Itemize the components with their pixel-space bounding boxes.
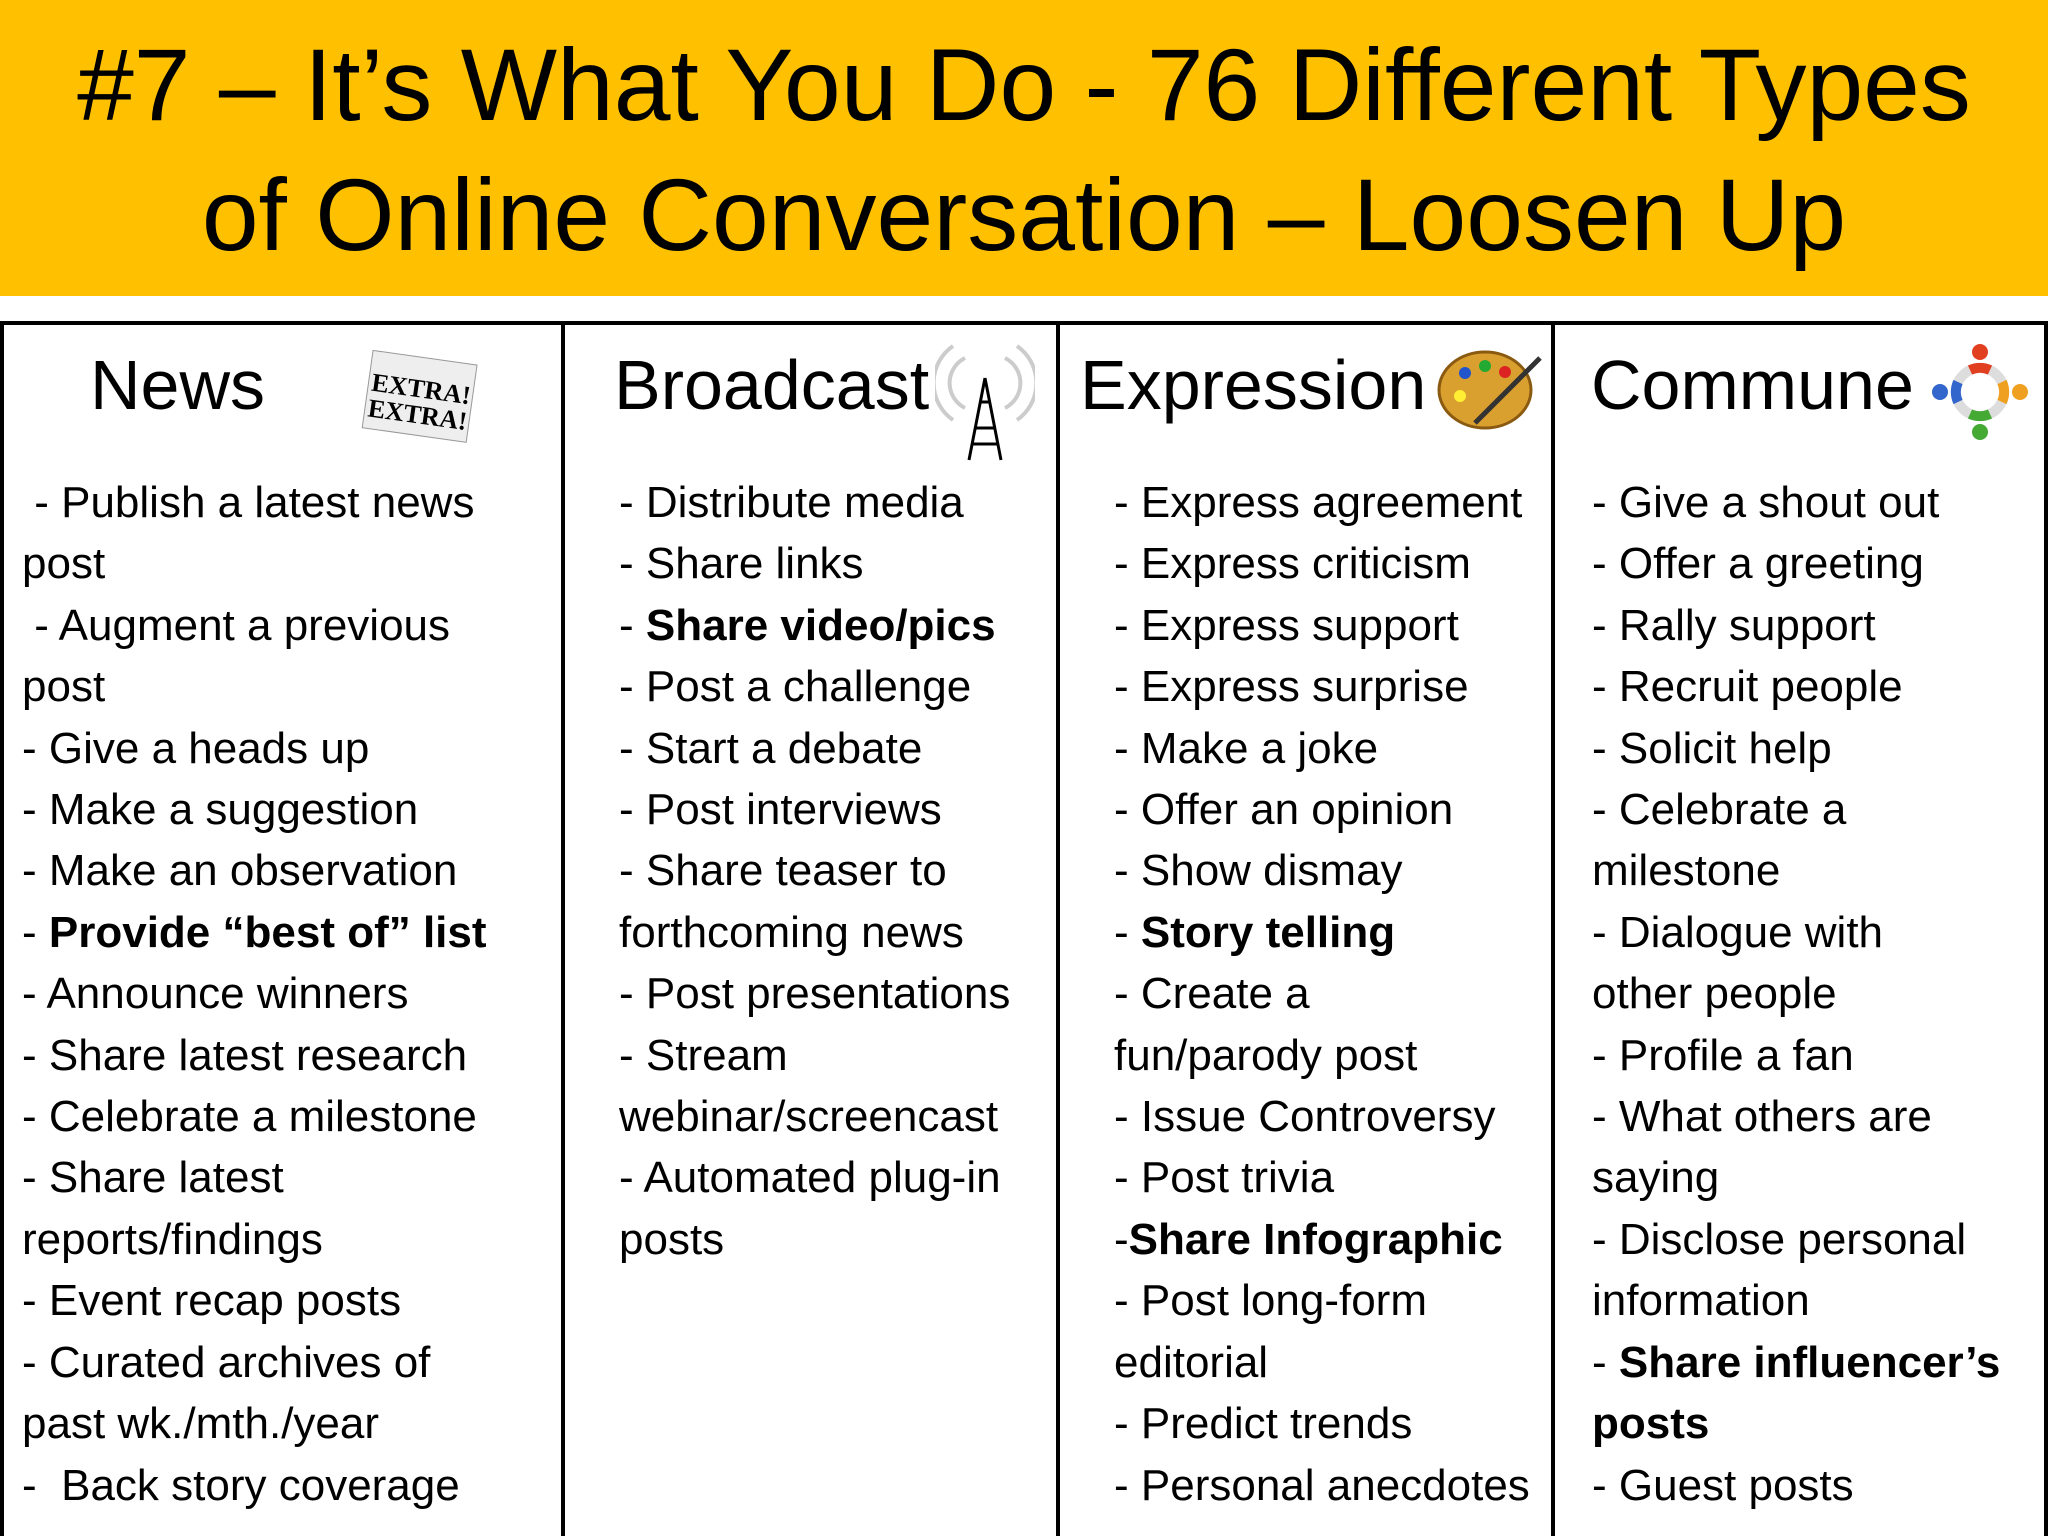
heading: Expression: Expression bbox=[1080, 346, 1426, 424]
list: News: - Make an observation bbox=[22, 846, 457, 895]
list: Expression: - Story telling bbox=[1114, 908, 1395, 957]
title bbox=[0, 0, 2048, 296]
list: News: - Share latest research bbox=[22, 1031, 467, 1080]
list: Broadcast: - Automated plug-in bbox=[619, 1153, 1001, 1202]
list: News: - Celebrate a milestone bbox=[22, 1092, 477, 1141]
list: Commune: - Celebrate a bbox=[1592, 785, 1846, 834]
list: Broadcast: - Stream bbox=[619, 1031, 788, 1080]
list: News: - Provide “best of” list bbox=[22, 908, 487, 957]
list: Expression: - Express agreement bbox=[1114, 478, 1522, 527]
list: Commune bbox=[1592, 478, 2000, 1510]
list: Broadcast: - Share links bbox=[619, 539, 864, 588]
list: Commune: - Recruit people bbox=[1592, 662, 1903, 711]
list: Broadcast: - Post a challenge bbox=[619, 662, 971, 711]
list: Expression: - Express criticism bbox=[1114, 539, 1471, 588]
icon: newspaper: EXTRA! bbox=[370, 368, 473, 410]
list: News: - Curated archives of bbox=[22, 1338, 430, 1387]
icon: newspaper bbox=[362, 350, 478, 443]
list: Commune: - Disclose personal bbox=[1592, 1215, 1966, 1264]
list: Commune: - Share influencer’s bbox=[1592, 1338, 2000, 1387]
list: News: - Make a suggestion bbox=[22, 785, 418, 834]
list: Expression: - Create a bbox=[1114, 969, 1310, 1018]
list: Expression: - Make a joke bbox=[1114, 724, 1378, 773]
list: Expression: -Share Infographic bbox=[1114, 1215, 1503, 1264]
list: Broadcast: - Post presentations bbox=[619, 969, 1010, 1018]
list: News: - Share latest bbox=[22, 1153, 284, 1202]
list: Broadcast: - Share video/pics bbox=[619, 601, 996, 650]
list: Broadcast: - Start a debate bbox=[619, 724, 922, 773]
list: News: - Augment a previous bbox=[34, 601, 450, 650]
list: Expression: - Express surprise bbox=[1114, 662, 1469, 711]
list: Broadcast: webinar/screencast bbox=[619, 1092, 998, 1141]
list: Expression: - Offer an opinion bbox=[1114, 785, 1453, 834]
list: Commune: - Profile a fan bbox=[1592, 1031, 1854, 1080]
list: Broadcast bbox=[619, 478, 1010, 1264]
title: of Online Conversation – Loosen Up bbox=[202, 158, 1846, 272]
list: Commune: - Dialogue with bbox=[1592, 908, 1883, 957]
list: News: post bbox=[22, 662, 105, 711]
list: Commune: - Give a shout out bbox=[1592, 478, 1939, 527]
list: Broadcast: - Post interviews bbox=[619, 785, 942, 834]
list: News: - Back story coverage bbox=[22, 1460, 460, 1510]
list: Commune: - Solicit help bbox=[1592, 724, 1832, 773]
list: Broadcast: forthcoming news bbox=[619, 908, 964, 957]
list: Commune: - What others are bbox=[1592, 1092, 1932, 1141]
heading: Commune: Commune bbox=[1591, 346, 1914, 424]
list: Broadcast: - Share teaser to bbox=[619, 846, 947, 895]
list: Commune: saying bbox=[1592, 1153, 1719, 1202]
list: News: - Give a heads up bbox=[22, 724, 369, 773]
list: Commune: milestone bbox=[1592, 846, 1780, 895]
list: Expression: - Issue Controversy bbox=[1114, 1092, 1495, 1141]
list: Commune: - Rally support bbox=[1592, 601, 1876, 650]
icon: newspaper: EXTRA! bbox=[366, 393, 469, 436]
list: Broadcast: posts bbox=[619, 1215, 724, 1264]
list: Expression: - Personal anecdotes bbox=[1114, 1460, 1530, 1510]
icon: antenna tower bbox=[935, 344, 1035, 460]
list: Broadcast: - Distribute media bbox=[619, 478, 964, 527]
title: #7 – It’s What You Do - 76 Different Types bbox=[77, 28, 1971, 142]
list: News: post bbox=[22, 539, 105, 588]
icon: community people ring bbox=[1932, 344, 2028, 440]
list: Expression: - Express support bbox=[1114, 601, 1459, 650]
list: Expression: - Show dismay bbox=[1114, 846, 1403, 895]
list: Expression: editorial bbox=[1114, 1338, 1268, 1387]
list: Commune: - Offer a greeting bbox=[1592, 539, 1924, 588]
list: Expression: - Post trivia bbox=[1114, 1153, 1334, 1202]
list: Commune: - Guest posts bbox=[1592, 1460, 1854, 1510]
list: Commune: information bbox=[1592, 1276, 1810, 1325]
list: Expression: - Predict trends bbox=[1114, 1399, 1412, 1448]
list: Commune: posts bbox=[1592, 1399, 1709, 1448]
heading: Broadcast: Broadcast bbox=[614, 346, 929, 424]
list: Expression: - Post long-form bbox=[1114, 1276, 1427, 1325]
list: Expression bbox=[1114, 478, 1530, 1510]
list: News: - Event recap posts bbox=[22, 1276, 401, 1325]
icon: paint palette bbox=[1438, 350, 1542, 430]
list: Commune: other people bbox=[1592, 969, 1837, 1018]
list: Expression: fun/parody post bbox=[1114, 1031, 1417, 1080]
list: News: reports/findings bbox=[22, 1215, 323, 1264]
list: News: past wk./mth./year bbox=[22, 1399, 379, 1448]
list: News: - Publish a latest news bbox=[34, 478, 474, 527]
heading: News: News bbox=[90, 346, 265, 424]
list: News bbox=[22, 478, 487, 1510]
list: News: - Announce winners bbox=[22, 969, 408, 1018]
table frame bbox=[0, 321, 2048, 1536]
